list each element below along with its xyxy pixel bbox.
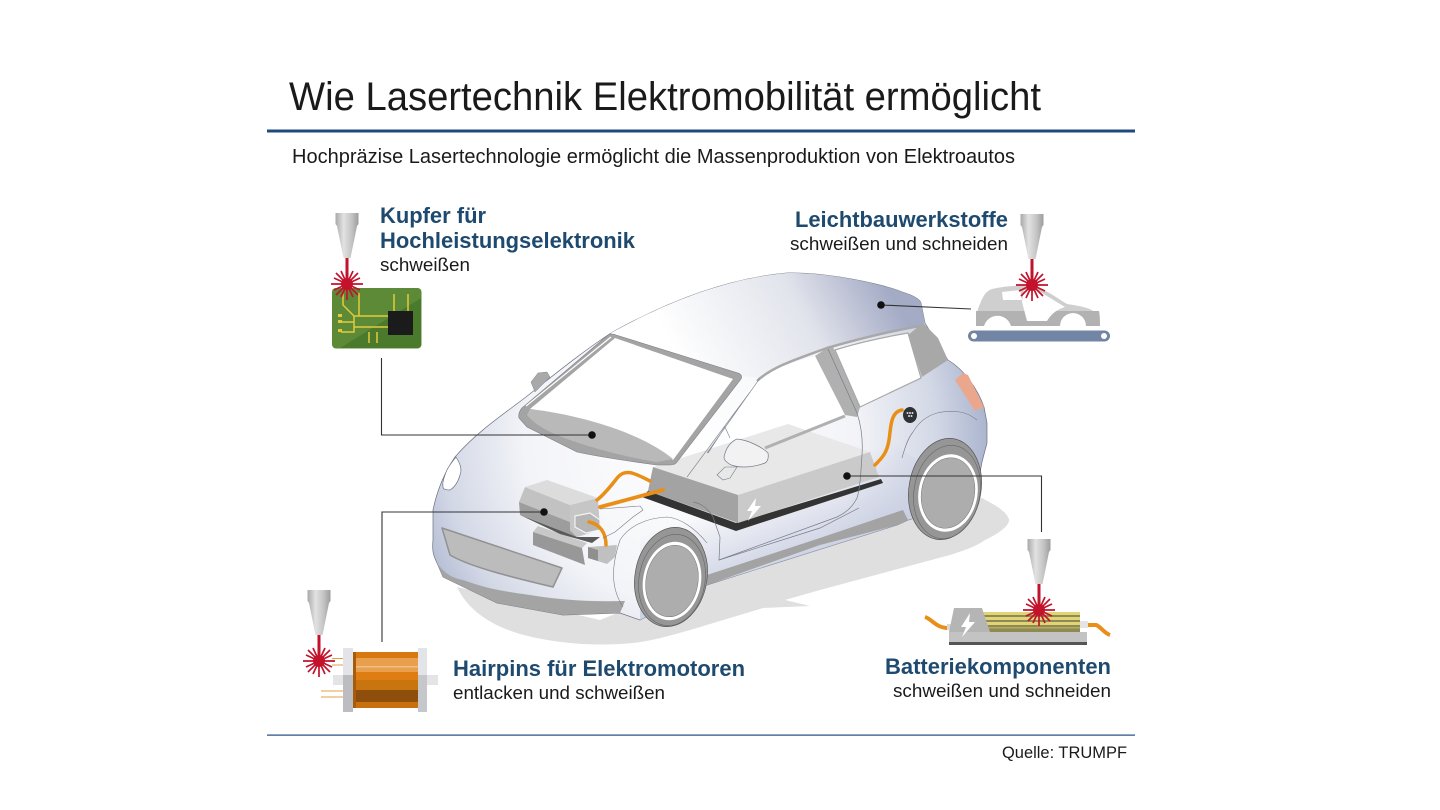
battery cell (925, 608, 1110, 645)
leader: motor (382, 508, 548, 642)
motor unit (519, 480, 617, 565)
driver mirror (724, 439, 768, 467)
ground shadow (457, 498, 1009, 644)
copper heading: Kupfer für (380, 203, 486, 228)
windshield glass (530, 338, 733, 460)
copper description: schweißen (380, 255, 470, 275)
lower door panel (719, 508, 859, 560)
laser head (1016, 214, 1048, 301)
leader: battery (843, 472, 1042, 532)
rear pillar (908, 323, 948, 377)
laser head (331, 213, 363, 300)
front wheel (627, 522, 715, 632)
battery base (642, 479, 883, 531)
windshield frame highlight (526, 337, 611, 406)
battery lightning (747, 498, 761, 521)
footer rule (267, 734, 1135, 736)
leader: copper to dashboard (382, 358, 596, 439)
car illustration (433, 273, 1009, 644)
laser head (1023, 539, 1055, 626)
front side window (716, 356, 845, 470)
rear side window (835, 333, 921, 407)
conveyor belt (968, 330, 1110, 342)
roof edge strip (757, 326, 920, 381)
window sill strip (765, 416, 845, 448)
roof (611, 273, 925, 378)
charging socket (903, 407, 917, 423)
subtitle: Hochpräzise Lasertechnologie ermöglicht die Massenproduktion von Elektroautos (292, 146, 1015, 168)
cell lightning (961, 613, 975, 637)
battery pack (648, 424, 879, 523)
callout: lightweight materials (790, 207, 1110, 342)
title rule (267, 130, 1135, 132)
lightweight heading: Leichtbauwerkstoffe (795, 207, 1008, 232)
copper heading line 2: Hochleistungselektronik (380, 228, 636, 253)
mirror stalk (717, 467, 737, 480)
circuit board (332, 288, 422, 348)
battery description: schweißen und schneiden (893, 681, 1111, 701)
rear wheel (901, 433, 989, 545)
body lower tint (640, 441, 975, 620)
battery heading: Batteriekomponenten (885, 654, 1111, 679)
headlight (443, 457, 461, 490)
title: Wie Lasertechnik Elektromobilität ermöglicht (289, 75, 1041, 119)
lower bumper (437, 563, 625, 615)
car body-in-white (976, 286, 1100, 326)
car body (433, 273, 987, 620)
left mirror (531, 372, 550, 392)
grille (442, 528, 562, 587)
lightweight description: schweißen und schneiden (790, 234, 1008, 254)
rear wheel arch line (902, 411, 977, 458)
leader: roof (877, 301, 971, 309)
A pillar lines (687, 378, 760, 477)
microchip (388, 311, 413, 335)
hood line (600, 506, 643, 538)
tail light (955, 373, 984, 411)
B pillar (815, 347, 860, 417)
hairpins heading: Hairpins für Elektromotoren (453, 656, 745, 681)
callout: battery components (885, 539, 1111, 701)
callout: hairpins (303, 590, 745, 712)
windshield frame (519, 334, 742, 465)
coil (333, 648, 438, 712)
wires (321, 658, 344, 697)
door outline (693, 349, 862, 560)
hairpins description: entlacken und schweißen (453, 683, 665, 703)
dashboard under glass (527, 409, 673, 462)
sill (707, 510, 908, 585)
source: Quelle: TRUMPF (1002, 743, 1127, 762)
front wheel arch (614, 517, 707, 607)
callout: copper (331, 203, 636, 348)
orange cables (589, 410, 902, 545)
laser head (303, 590, 335, 677)
